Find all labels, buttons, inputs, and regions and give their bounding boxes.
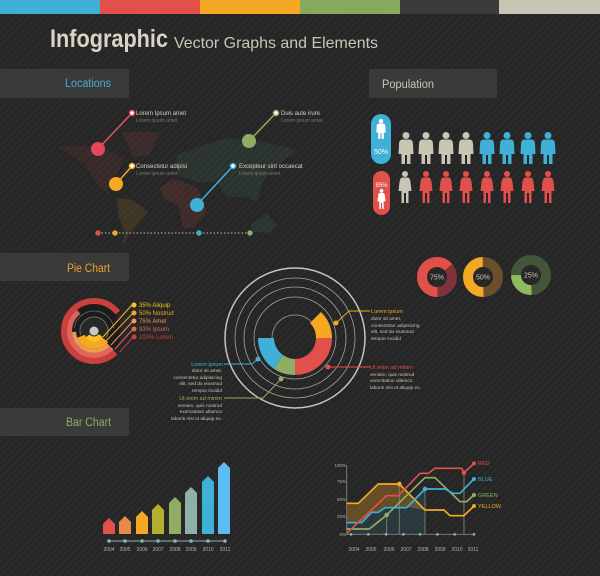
location pin: green: Lorem ipsum amet [281, 118, 323, 124]
line chart: BLUE [478, 477, 493, 483]
donut callout: blue: dolor sit amet, [192, 368, 222, 374]
bar chart timeline: 2009 [185, 547, 197, 553]
location pin: green [242, 110, 323, 148]
line chart: 75% [337, 479, 346, 484]
small donut: 50%: 50% [476, 274, 490, 282]
pie chart legend: 50% Nostrud [139, 311, 174, 317]
heading: Pie Chart: Pie Chart [67, 263, 111, 275]
line chart: YELLOW [478, 504, 502, 510]
location pin: green: Duis aute irure [281, 111, 321, 117]
heading: Pie Chart [0, 253, 129, 281]
heading: Population: Population [382, 79, 434, 91]
donut callout: amber: tempor incidid [371, 336, 401, 342]
line chart: 50% [337, 497, 346, 502]
population: female badge: 85% [375, 183, 388, 189]
heading: Locations: Locations [65, 78, 111, 90]
donut callout: amber: elit, sed do eiusmod [371, 329, 414, 335]
donut callout: red: exercitation ullamco [370, 378, 413, 384]
bar chart [103, 462, 230, 534]
population: male badge: 50% [374, 149, 388, 156]
donut callout: red: veniam, quis nostrud [370, 372, 415, 378]
top colour band [0, 0, 600, 14]
bar chart timeline: 2006 [136, 547, 148, 553]
line chart [334, 461, 502, 553]
donut callout: blue: tempor incidid [192, 388, 222, 394]
population: female badge [373, 171, 390, 215]
population: male badge [371, 114, 391, 164]
bar chart timeline: 2005 [119, 547, 131, 553]
title [50, 25, 378, 53]
pie chart legend: 35% Aliquip [139, 303, 171, 309]
donut callout: green [171, 376, 284, 422]
bar chart timeline: 2008 [169, 547, 181, 553]
line chart: 2007 [400, 547, 412, 553]
population: male figures [398, 132, 556, 164]
heading: Population [369, 69, 497, 98]
heading: Locations [0, 69, 129, 98]
radial donut chart [225, 268, 365, 408]
bar chart timeline: 2004 [103, 547, 115, 553]
pie chart legend: 100% Lorem [139, 335, 173, 341]
location pin: red [91, 110, 186, 156]
bar chart timeline: 2010 [202, 547, 214, 553]
population: female figures [398, 171, 554, 203]
donut callout: green: veniam, quis nostrud [178, 403, 222, 409]
line chart: 2011 [468, 547, 479, 553]
line chart: 25% [337, 514, 346, 519]
line chart: 2005 [365, 547, 377, 553]
donut callout: red: Ut enim ad minim [370, 365, 413, 371]
world map [58, 132, 298, 248]
location pin: red: Lorem ipsum amet [136, 118, 178, 124]
concentric pie chart [52, 289, 136, 373]
location timeline [95, 230, 253, 236]
donut callout: amber: consectetur adipisicing [371, 323, 420, 329]
small donut: 75%: 75% [430, 274, 444, 282]
bar chart timeline [103, 539, 231, 553]
donut callout: amber [334, 309, 420, 342]
small donut: 50% [468, 262, 498, 292]
line chart: 2008 [417, 547, 429, 553]
donut callout: amber: Lorem ipsum [371, 309, 403, 315]
line chart: RED [478, 461, 490, 467]
donut callout: green: Ut enim ad minim [179, 396, 222, 402]
line chart: 2010 [451, 547, 463, 553]
small donut: 75% [422, 262, 452, 292]
donut callout: red: laboris nisi ut aliquip ex. [370, 385, 421, 391]
line chart: 2006 [383, 547, 395, 553]
donut callout: blue: consectetur adipisicing [173, 375, 222, 381]
bar chart timeline: 2011 [220, 547, 231, 553]
line chart: GREEN [478, 493, 498, 499]
heading: Bar Chart: Bar Chart [66, 417, 112, 429]
pie chart legend: 93% Ipsum [139, 327, 169, 333]
title: Vector Graphs and Elements [174, 35, 378, 52]
small donut: 25%: 25% [524, 272, 538, 280]
location pin: blue [190, 164, 303, 212]
location pin: amber: Consectetur adipisi [136, 164, 187, 170]
pie chart legend: 75% Amet [139, 319, 167, 325]
location pin: red: Lorem Ipsum amet [136, 111, 186, 117]
donut callout: blue: Lorem ipsum [191, 362, 223, 368]
location pin: amber: Lorem ipsum amet [136, 171, 178, 177]
line chart: 2009 [434, 547, 446, 553]
bar chart timeline: 2007 [152, 547, 164, 553]
donut callout: blue: elit, sed do eiusmod [179, 381, 222, 387]
line chart: 2004 [348, 547, 360, 553]
location pin: blue: Lorem ipsum amet [239, 171, 281, 177]
line chart: 0% [339, 532, 346, 537]
line chart: 100% [334, 463, 346, 468]
donut callout: red [326, 364, 421, 391]
pie chart legend [103, 302, 174, 352]
donut callout: green: laboris nisi ut aliquip ex. [171, 416, 222, 422]
location pin: amber [109, 164, 187, 191]
donut callout: blue [173, 356, 260, 394]
donut callout: amber: dolor sit amet, [371, 316, 401, 322]
heading: Bar Chart [0, 408, 129, 436]
donut callout: green: exercitation ullamco [180, 409, 222, 415]
location pin: blue: Excepteur sint occaecat [239, 164, 303, 170]
small donut: 25% [516, 260, 546, 290]
title: Infographic [50, 25, 168, 53]
